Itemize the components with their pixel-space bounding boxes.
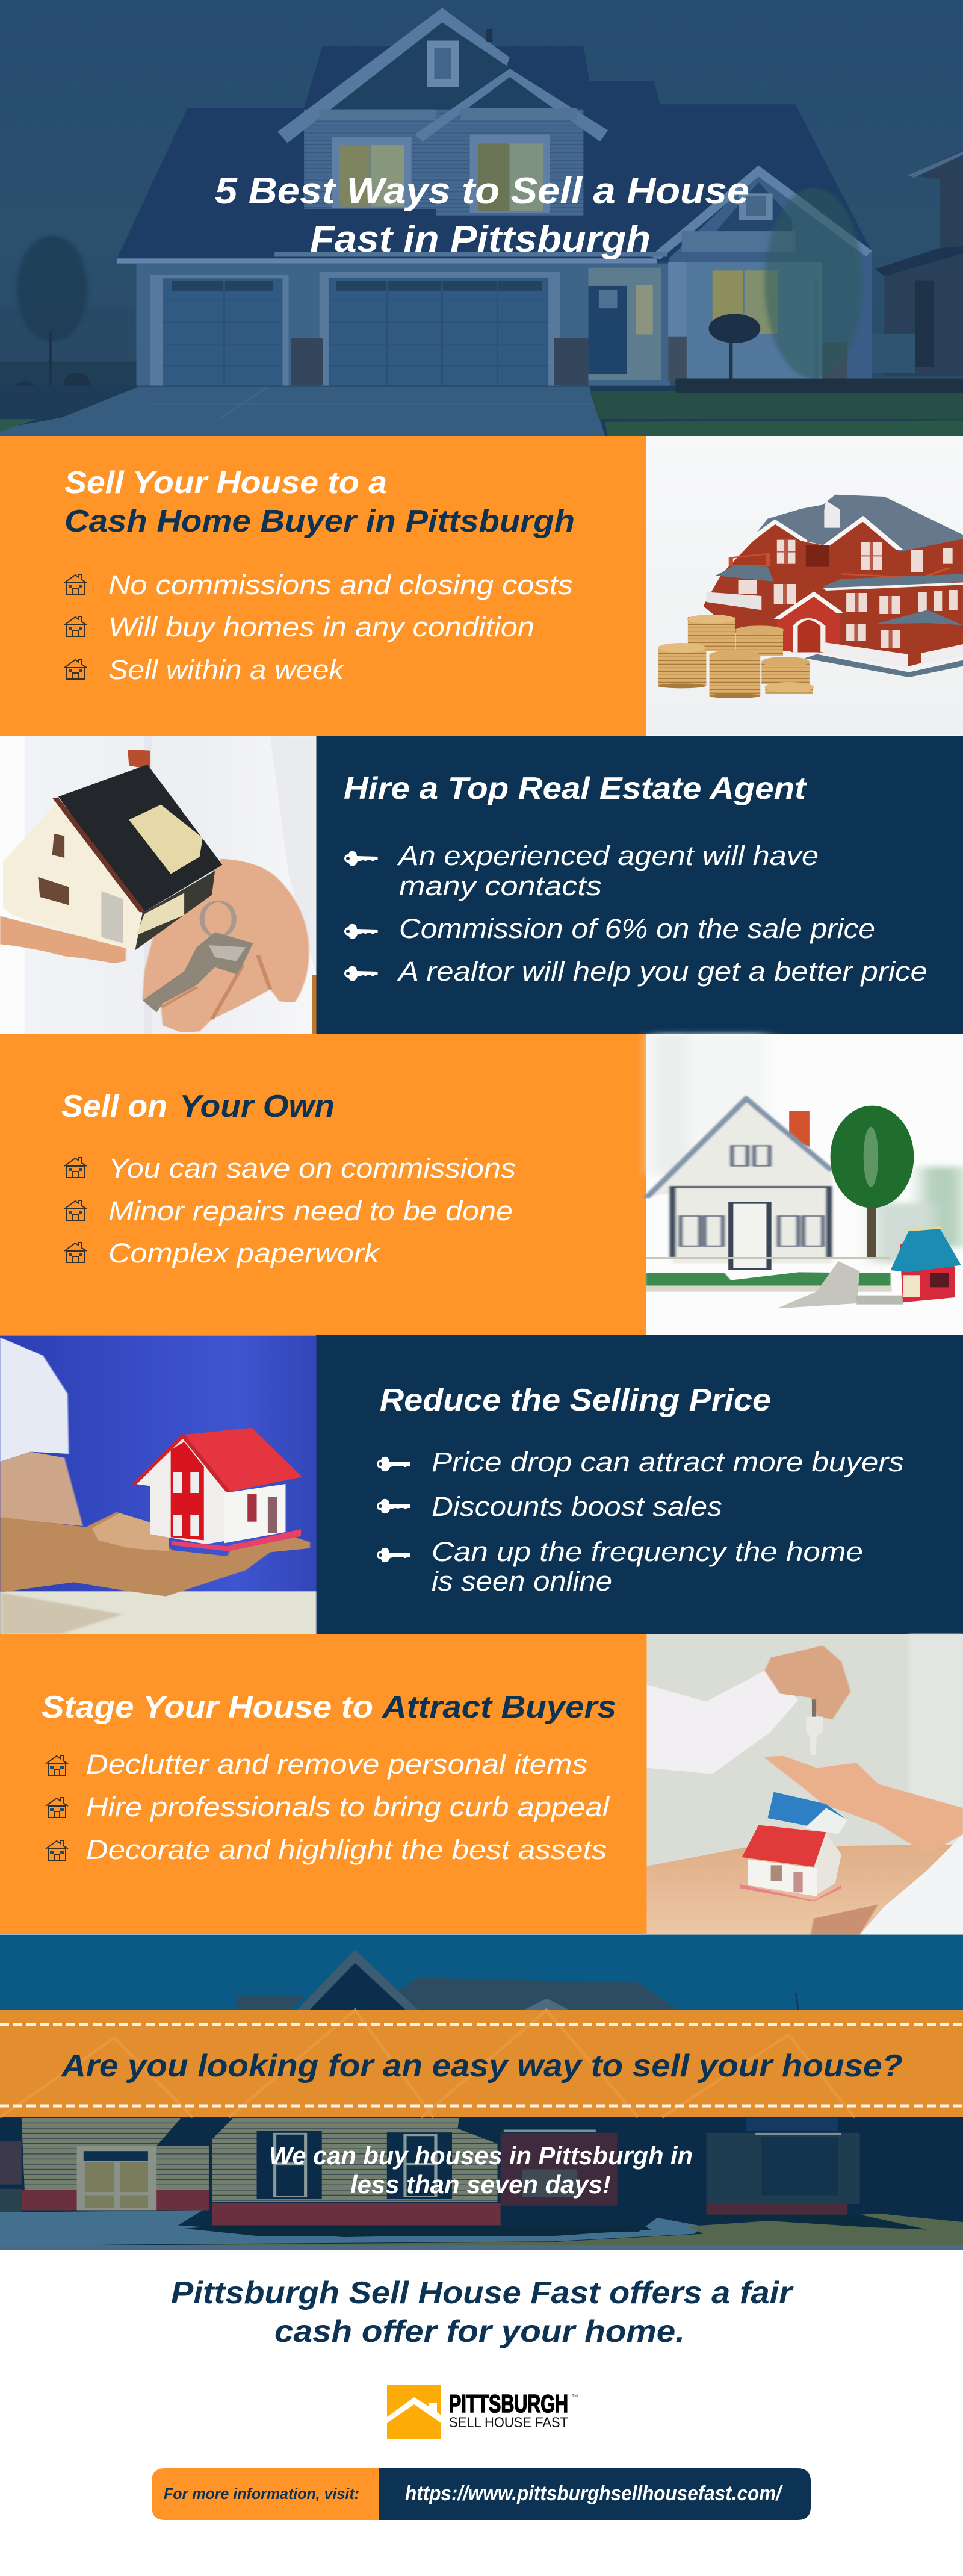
bullet list: You can save on commissions <box>108 1153 516 1184</box>
bullet list <box>46 1749 610 1865</box>
hero photo: house at dusk with navy overlay <box>0 0 963 437</box>
section heading: Attract Buyers <box>381 1690 616 1725</box>
bullet list: Hire professionals to bring curb appeal <box>86 1792 610 1822</box>
navy text background <box>316 1335 963 1634</box>
CTA sub-text: We can buy houses in Pittsburgh in <box>269 2141 693 2170</box>
question text: Are you looking for an easy way to sell your house? <box>60 2049 903 2084</box>
bullet list: Decorate and highlight the best assets <box>86 1834 607 1865</box>
closing statement: cash offer for your home. <box>274 2314 685 2349</box>
hero title: Fast in Pittsburgh <box>310 219 651 260</box>
bullet list: Discounts boost sales <box>432 1491 722 1522</box>
orange text background <box>0 436 646 736</box>
photo: handing over keys above model house <box>646 1634 963 1934</box>
bullet list: A realtor will help you get a better price <box>397 956 927 987</box>
bullet list: Minor repairs need to be done <box>108 1196 513 1226</box>
website URL: https://www.pittsburghsellhousefast.com/ <box>405 2482 783 2505</box>
website pill <box>152 2468 811 2520</box>
navy text background <box>316 736 963 1034</box>
photo: model house, tree and keys <box>646 1034 963 1335</box>
bullet list: Declutter and remove personal items <box>86 1749 587 1780</box>
panel: sell on your own <box>0 1034 963 1335</box>
hero title <box>215 170 749 260</box>
photo: suburban house with navy overlay <box>0 1935 963 2250</box>
section heading: Sell Your House to a <box>64 465 387 500</box>
bullet list: Commission of 6% on the sale price <box>399 913 875 944</box>
bullet list <box>344 840 927 987</box>
bullet list: An experienced agent will have <box>397 840 819 871</box>
bullet list <box>377 1447 904 1597</box>
section heading: Your Own <box>179 1089 335 1124</box>
visit label: For more information, visit: <box>164 2484 359 2503</box>
bullet list: No commissions and closing costs <box>108 570 573 600</box>
orange text background <box>0 1034 646 1335</box>
logo: Pittsburgh Sell House Fast: PITTSBURGH <box>449 2389 568 2418</box>
bullet list <box>64 1153 516 1268</box>
panel: reduce the selling price <box>0 1335 963 1634</box>
closing statement <box>171 2276 794 2349</box>
bullet list <box>64 570 573 685</box>
closing statement: Pittsburgh Sell House Fast offers a fair <box>171 2276 794 2311</box>
bullet list: is seen online <box>432 1566 612 1597</box>
hero title: 5 Best Ways to Sell a House <box>215 170 749 212</box>
bullet list: Will buy homes in any condition <box>108 612 534 642</box>
panel: hero header <box>0 0 963 437</box>
panel: stage your house <box>0 1634 963 1934</box>
orange question ribbon <box>0 2010 963 2117</box>
panel: call to action banner <box>0 1935 963 2250</box>
photo: brick model house and gold coins <box>646 436 963 736</box>
photo: hand holding small red-roofed house <box>0 1335 317 1634</box>
bullet list: Complex paperwork <box>108 1238 381 1268</box>
panel: footer <box>152 2276 811 2520</box>
bullet list: many contacts <box>399 871 602 901</box>
orange text background <box>0 1634 647 1934</box>
logo: Pittsburgh Sell House Fast: SELL HOUSE FAST <box>449 2415 568 2431</box>
section heading: Stage Your House to <box>42 1690 373 1725</box>
logo: Pittsburgh Sell House Fast <box>387 2385 578 2439</box>
section heading: Cash Home Buyer in Pittsburgh <box>64 504 575 539</box>
panel: hire a top real estate agent <box>0 736 963 1034</box>
bullet list: Price drop can attract more buyers <box>432 1447 904 1477</box>
section heading: Reduce the Selling Price <box>380 1383 771 1418</box>
CTA sub-text <box>269 2141 693 2199</box>
section heading: Hire a Top Real Estate Agent <box>344 771 808 806</box>
section heading <box>42 1690 616 1725</box>
CTA sub-text: less than seven days! <box>350 2170 611 2199</box>
section heading: Sell on <box>61 1089 167 1124</box>
bullet list: Can up the frequency the home <box>432 1536 863 1567</box>
section heading <box>64 465 575 539</box>
logo: Pittsburgh Sell House Fast: TM <box>572 2394 578 2398</box>
panel: sell to a cash home buyer <box>0 436 963 736</box>
photo: hands holding model house and keys <box>0 736 317 1034</box>
section heading <box>61 1089 335 1124</box>
bullet list: Sell within a week <box>108 654 345 685</box>
